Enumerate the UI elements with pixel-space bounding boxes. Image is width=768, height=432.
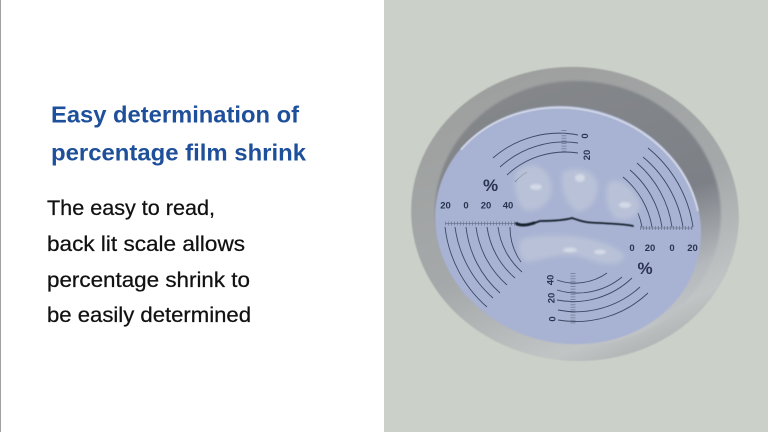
film seam crack [516, 218, 633, 226]
film highlights [530, 174, 631, 254]
scale numbers left: 40 [503, 200, 513, 212]
scale numbers left: 20 [440, 200, 451, 212]
scale numbers bottom: 20 [546, 293, 558, 303]
scale numbers left [440, 200, 513, 212]
body text: The easy to read, [47, 197, 215, 220]
scale numbers left: 0 [463, 200, 469, 212]
percent sign right: % [637, 259, 653, 278]
metal rim [399, 53, 751, 375]
scale numbers right: 20 [645, 243, 655, 254]
body text [47, 197, 251, 327]
plate highlight [461, 81, 716, 213]
dish with shrink scale [399, 53, 751, 375]
scale ticks [445, 130, 693, 325]
scale numbers bottom [546, 275, 558, 322]
scale numbers top [580, 133, 593, 160]
scale numbers left: 20 [481, 200, 491, 212]
body text: back lit scale allows [47, 233, 245, 256]
heading: percentage film shrink [51, 140, 307, 166]
scale numbers top: 0 [580, 133, 591, 139]
body text: percentage shrink to [47, 269, 250, 292]
scale numbers bottom: 40 [546, 275, 556, 285]
scale numbers right: 20 [687, 243, 698, 254]
panel: white text panel [0, 0, 384, 432]
scale numbers right: 0 [669, 243, 675, 254]
backlit scale plate [408, 76, 728, 374]
film fragments [515, 165, 640, 264]
scale numbers right [629, 243, 698, 254]
panel: machine surface [384, 0, 768, 432]
body text: be easily determined [47, 304, 251, 327]
heading [51, 102, 307, 166]
heading: Easy determination of [51, 102, 299, 128]
percent sign left: % [483, 176, 498, 195]
scale numbers bottom: 0 [548, 316, 558, 322]
scale arcs [445, 133, 693, 322]
scale numbers right: 0 [629, 243, 635, 254]
inner wall [424, 69, 732, 357]
scale numbers top: 20 [582, 150, 593, 160]
